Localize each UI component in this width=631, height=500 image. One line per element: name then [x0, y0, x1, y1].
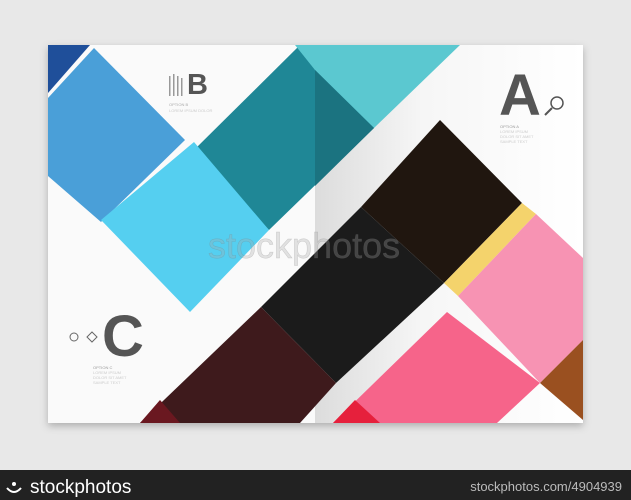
- footer bar: [0, 470, 631, 500]
- heading: C: OPTION C: [93, 365, 112, 370]
- shape: light teal: [295, 45, 460, 128]
- footer bar: stockphotos.com/4904939: [470, 479, 622, 494]
- heading: B: B: [187, 69, 208, 101]
- shape: brown strip: [540, 340, 583, 420]
- shape: blue square: [48, 48, 185, 222]
- heading: B: [169, 69, 212, 113]
- footer bar: stockphotos: [30, 477, 131, 498]
- heading: A: A: [499, 63, 541, 128]
- heading: A: SAMPLE TEXT: [500, 139, 528, 144]
- heading: B: LOREM IPSUM DOLOR: [169, 108, 212, 113]
- heading: C: C: [102, 304, 144, 369]
- shape: navy corner: [48, 45, 90, 93]
- page background: [48, 45, 583, 423]
- heading: A: LOREM IPSUM: [500, 129, 528, 134]
- shape: dark teal overlap: [315, 70, 374, 186]
- heading: C: LOREM IPSUM: [93, 370, 121, 375]
- heading: A: OPTION A: [500, 124, 519, 129]
- heading: C: [70, 304, 144, 385]
- shape: cyan square: [101, 142, 269, 312]
- heading: C: DOLOR SIT AMET: [93, 375, 127, 380]
- heading: A: DOLOR SIT AMET: [500, 134, 534, 139]
- heading: C: SAMPLE TEXT: [93, 380, 121, 385]
- shape: hot pink: [333, 312, 540, 423]
- watermark: stockphotos: [208, 225, 400, 266]
- shape: yellow strip: [444, 203, 536, 296]
- shape: black band: [140, 120, 522, 423]
- shape: light pink: [458, 214, 583, 383]
- shape: red corner: [333, 400, 380, 423]
- panel: geometric shapes: [48, 45, 583, 423]
- shape: teal square: [194, 45, 380, 230]
- heading: A: [499, 63, 563, 144]
- heading: B: OPTION B: [169, 102, 188, 107]
